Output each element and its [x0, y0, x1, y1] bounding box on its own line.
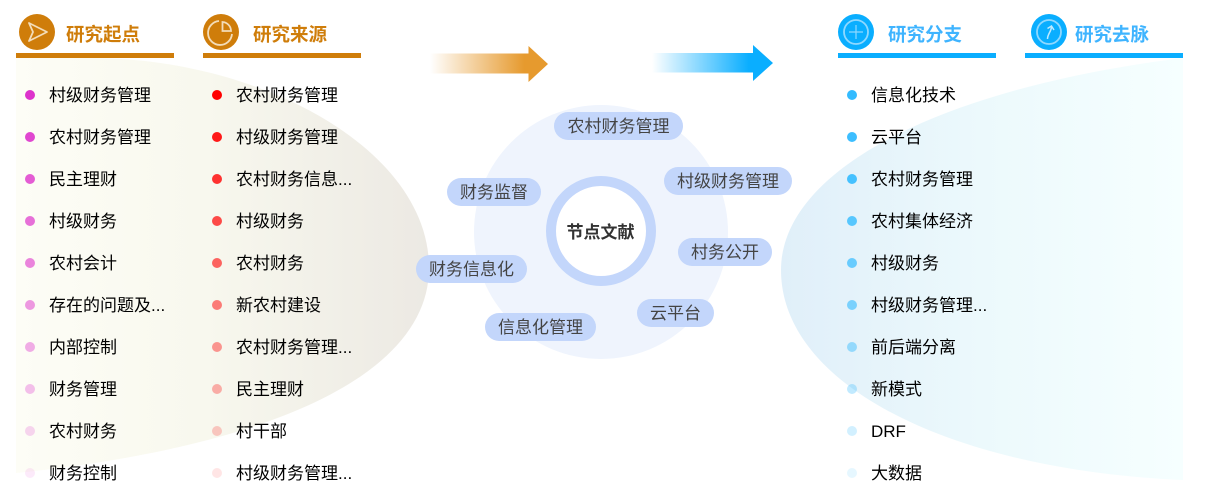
- heading: 研究分支: 研究分支: [888, 24, 962, 45]
- center ring: 节点文献: [546, 176, 656, 286]
- panel: 研究分支: [838, 14, 996, 483]
- heading underline: [16, 53, 174, 58]
- item: [847, 128, 922, 147]
- item: 内部控制: [49, 338, 117, 357]
- item: 农村集体经济: [871, 212, 973, 231]
- tag: 财务信息化: [429, 260, 514, 279]
- tag: [447, 178, 541, 206]
- arrow: orange: [434, 46, 548, 82]
- item: [847, 380, 922, 399]
- item: [847, 464, 922, 483]
- arrow: blue: [655, 45, 773, 81]
- tag: 村务公开: [691, 243, 759, 262]
- item: 农村财务管理...: [236, 338, 352, 357]
- item: [212, 422, 287, 441]
- item: 农村财务管理: [236, 86, 338, 105]
- item: 村级财务管理...: [236, 464, 352, 483]
- item: 民主理财: [236, 380, 304, 399]
- tag: 农村财务管理: [568, 117, 670, 136]
- outer circle: [474, 105, 728, 359]
- tag: [637, 299, 714, 327]
- heading: 研究去脉: 研究去脉: [1075, 24, 1149, 45]
- item: 新农村建设: [236, 296, 321, 315]
- item: 村级财务管理: [236, 128, 338, 147]
- item: 农村财务信息...: [236, 170, 352, 189]
- heading underline: [1025, 53, 1183, 58]
- panel: 研究来源: [203, 14, 361, 483]
- item: 财务控制: [49, 464, 117, 483]
- tag: [485, 313, 596, 341]
- tag: [678, 238, 772, 266]
- icon: return arrow circle: [1031, 14, 1067, 50]
- tag: [416, 255, 527, 283]
- item: 村级财务: [49, 212, 117, 231]
- item: 农村财务: [49, 422, 117, 441]
- item: 农村财务管理: [49, 128, 151, 147]
- heading: 研究起点: 研究起点: [66, 24, 140, 45]
- tag: [554, 112, 683, 140]
- item: 信息化技术: [871, 86, 956, 105]
- item: 村级财务管理: [49, 86, 151, 105]
- center diagram: [416, 105, 792, 359]
- item: 民主理财: [49, 170, 117, 189]
- icon: plus circle: [838, 14, 874, 50]
- item: 村级财务: [871, 254, 939, 273]
- heading: 研究来源: 研究来源: [253, 24, 327, 45]
- center ring: 节点文献: 节点文献: [566, 223, 634, 242]
- item: 农村财务管理: [871, 170, 973, 189]
- icon: paper plane: [19, 14, 55, 50]
- item: 财务管理: [49, 380, 117, 399]
- item: 新模式: [871, 380, 922, 399]
- item: 村级财务管理...: [871, 296, 987, 315]
- tag: 财务监督: [460, 183, 528, 202]
- tag: 信息化管理: [498, 318, 583, 337]
- item: 村级财务: [236, 212, 304, 231]
- heading underline: [203, 53, 361, 58]
- panel: 研究起点: [16, 14, 174, 483]
- item: DRF: [871, 422, 906, 441]
- tag: 村级财务管理: [677, 172, 779, 191]
- icon: pie chart: [203, 14, 239, 50]
- item: 农村会计: [49, 254, 117, 273]
- item: 前后端分离: [871, 338, 956, 357]
- item: 云平台: [871, 128, 922, 147]
- tag: [664, 167, 792, 195]
- item: 农村财务: [236, 254, 304, 273]
- heading underline: [838, 53, 996, 58]
- item: 存在的问题及...: [49, 296, 165, 315]
- item: 大数据: [871, 464, 922, 483]
- item: 村干部: [236, 422, 287, 441]
- panel: 研究去脉: [1025, 14, 1183, 58]
- tag: 云平台: [650, 304, 701, 323]
- item: [847, 422, 906, 441]
